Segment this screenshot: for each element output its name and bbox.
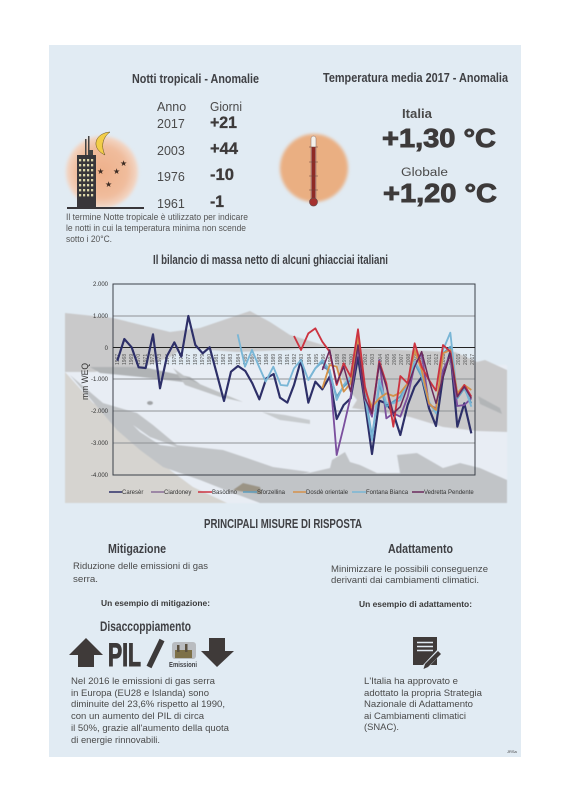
text: definizione adattamento bbox=[331, 564, 488, 586]
y axis labels bbox=[80, 282, 109, 479]
legend: Vedretta Pendente bbox=[424, 490, 474, 496]
x axis year labels: 2003 bbox=[370, 354, 376, 365]
x axis year labels: 1976 bbox=[179, 354, 185, 365]
x axis year labels: 2012 bbox=[434, 354, 440, 365]
icon: city at night: ★ bbox=[97, 167, 104, 176]
table: anomalie notti tropicali: Anno bbox=[157, 100, 186, 114]
x axis year labels: 2004 bbox=[378, 354, 384, 365]
icon: city at night bbox=[66, 132, 144, 209]
table: anomalie notti tropicali: -1 bbox=[210, 192, 224, 211]
legend: Sforzellina bbox=[257, 490, 286, 496]
icon: arrow up bbox=[69, 638, 103, 667]
y axis labels: 0 bbox=[105, 346, 109, 352]
x axis year labels: 1998 bbox=[335, 354, 341, 365]
legend bbox=[109, 490, 474, 496]
line: Fontana Bianca bbox=[238, 333, 471, 440]
legend: Ciardoney bbox=[164, 490, 191, 496]
icon: thermometer bbox=[280, 134, 348, 206]
panel: notti tropicali bbox=[66, 71, 259, 244]
x axis year labels: 2006 bbox=[392, 354, 398, 365]
x axis year labels: 1983 bbox=[228, 354, 234, 365]
x axis year labels: 2011 bbox=[427, 354, 433, 365]
subheading: esempio di mitigazione: Un esempio di mitigazione: bbox=[101, 599, 210, 608]
text: definizione notte tropicale bbox=[66, 212, 248, 244]
background: glacier photo bbox=[65, 311, 507, 503]
heading: mitigazione: Mitigazione bbox=[108, 541, 166, 556]
x axis year labels: 2007 bbox=[399, 354, 405, 365]
text: esempio adattamento: Nazionale di Adattamento bbox=[364, 699, 473, 710]
icon: city at night: ★ bbox=[105, 180, 112, 189]
text: definizione notte tropicale: Il termine Notte tropicale è utilizzato per indicare bbox=[66, 212, 248, 222]
table: anomalie notti tropicali: +44 bbox=[210, 139, 239, 158]
panel: temperatura media bbox=[280, 70, 509, 208]
panel: background bbox=[49, 45, 521, 757]
x axis year labels: 2013 bbox=[441, 354, 447, 365]
line: Sforzellina bbox=[308, 342, 471, 437]
text: definizione mitigazione: serra. bbox=[73, 574, 98, 585]
x axis year labels bbox=[115, 354, 476, 365]
x axis year labels: 1991 bbox=[285, 354, 291, 365]
text: esempio mitigazione: diminuite del 23,6% rispetto al 1990, bbox=[71, 699, 225, 710]
icon: city at night: ★ bbox=[120, 159, 127, 168]
x axis year labels: 2017 bbox=[470, 354, 476, 365]
table: anomalie notti tropicali bbox=[157, 100, 242, 211]
text: esempio mitigazione: di energie rinnovabili. bbox=[71, 735, 160, 746]
x axis year labels: 2015 bbox=[456, 354, 462, 365]
text: esempio mitigazione: Nel 2016 le emissioni di gas serra bbox=[71, 676, 216, 687]
text: definizione adattamento: Minimizzare le possibili conseguenze bbox=[331, 564, 488, 575]
stat: italia: +1,30 °C bbox=[382, 123, 496, 153]
x axis year labels: 1988 bbox=[264, 354, 270, 365]
x axis year labels: 1986 bbox=[250, 354, 256, 365]
x axis year labels: 2009 bbox=[413, 354, 419, 365]
text: esempio adattamento: adottato la propria Strategia bbox=[364, 688, 483, 699]
chart: bilancio di massa bbox=[65, 282, 507, 503]
x axis year labels: 1977 bbox=[186, 354, 192, 365]
table: anomalie notti tropicali: -10 bbox=[210, 165, 234, 184]
y axis labels: 2.000 bbox=[93, 282, 109, 288]
y axis labels: -2.000 bbox=[91, 409, 109, 415]
heading: temperatura media: Temperatura media 2017 - Anomalia bbox=[323, 70, 509, 85]
x axis year labels: 1992 bbox=[292, 354, 298, 365]
x axis year labels: 1982 bbox=[221, 354, 227, 365]
x axis year labels: 2002 bbox=[363, 354, 369, 365]
heading: disaccoppiamento: Disaccoppiamento bbox=[100, 618, 191, 634]
icon: arrow down bbox=[201, 638, 234, 667]
text: definizione mitigazione bbox=[73, 561, 208, 585]
x axis year labels: 2005 bbox=[385, 354, 391, 365]
x axis year labels: 1971 bbox=[143, 354, 149, 365]
table: anomalie notti tropicali: 2017 bbox=[157, 117, 185, 131]
line: Basòdino bbox=[294, 328, 471, 427]
x axis year labels: 1981 bbox=[214, 354, 220, 365]
x axis year labels: 2000 bbox=[349, 354, 355, 365]
heading: principali misure di risposta: PRINCIPALI MISURE DI RISPOSTA bbox=[204, 516, 362, 531]
signature: JRSa bbox=[507, 749, 518, 754]
x axis year labels: 1975 bbox=[172, 354, 178, 365]
x axis year labels: 1993 bbox=[299, 354, 305, 365]
text: definizione mitigazione: Riduzione delle emissioni di gas bbox=[73, 561, 208, 572]
legend: Dosdè orientale bbox=[306, 490, 349, 496]
data lines bbox=[117, 316, 471, 455]
icon: emissioni: Emissioni bbox=[169, 660, 197, 669]
icon: emissioni bbox=[169, 642, 197, 669]
x axis year labels: 1979 bbox=[200, 354, 206, 365]
x axis year labels: 1980 bbox=[207, 354, 213, 365]
heading: adattamento: Adattamento bbox=[388, 541, 453, 556]
table: anomalie notti tropicali: Giorni bbox=[210, 100, 242, 114]
x axis year labels: 1968 bbox=[122, 354, 128, 365]
text: esempio adattamento: (SNAC). bbox=[364, 722, 399, 733]
text: definizione adattamento: derivanti dai cambiamenti climatici. bbox=[331, 575, 479, 586]
table: anomalie notti tropicali: 2003 bbox=[157, 144, 185, 158]
text: definizione notte tropicale: le notti in cui la temperatura minima non scende bbox=[66, 223, 246, 233]
heading: notti tropicali: Notti tropicali - Anomalie bbox=[132, 71, 259, 86]
table: anomalie notti tropicali: 1976 bbox=[157, 170, 185, 184]
x axis year labels: 1973 bbox=[157, 354, 163, 365]
heading: bilancio di massa: Il bilancio di massa netto di alcuni ghiacciai italiani bbox=[153, 252, 388, 267]
x axis year labels: 1967 bbox=[115, 354, 121, 365]
legend: Caresèr bbox=[122, 490, 143, 496]
x axis year labels: 1999 bbox=[342, 354, 348, 365]
text: definizione notte tropicale: sotto i 20°C. bbox=[66, 234, 112, 244]
x axis year labels: 1974 bbox=[165, 354, 171, 365]
text: esempio adattamento bbox=[364, 676, 483, 733]
x axis year labels: 1984 bbox=[236, 354, 242, 365]
x axis year labels: 2014 bbox=[449, 354, 455, 365]
text: esempio adattamento: ai Cambiamenti climatici bbox=[364, 711, 466, 722]
text: esempio mitigazione: con un aumento del PIL di circa bbox=[71, 711, 205, 722]
line: Caresèr bbox=[117, 316, 471, 454]
x axis year labels: 2016 bbox=[463, 354, 469, 365]
legend: Basòdino bbox=[212, 490, 238, 496]
panel: mitigazione bbox=[69, 541, 234, 746]
stat: italia: Italia bbox=[402, 107, 433, 121]
x axis year labels: 1978 bbox=[193, 354, 199, 365]
icon: slash bbox=[149, 640, 162, 667]
label: PIL: PIL bbox=[108, 637, 141, 673]
line: Dosdè orientale bbox=[322, 337, 471, 410]
x axis year labels: 1972 bbox=[150, 354, 156, 365]
x axis year labels: 1994 bbox=[307, 354, 313, 365]
y axis labels: -1.000 bbox=[91, 377, 109, 383]
y axis labels: mm WEQ bbox=[80, 363, 90, 400]
x axis year labels: 1969 bbox=[129, 354, 135, 365]
text: esempio mitigazione: il 50%, grazie all'aumento della quota bbox=[71, 723, 230, 734]
y axis labels: 1.000 bbox=[93, 314, 109, 320]
x axis year labels: 1995 bbox=[314, 354, 320, 365]
line: Ciardoney bbox=[322, 347, 471, 455]
x axis year labels: 1987 bbox=[257, 354, 263, 365]
x axis year labels: 1997 bbox=[328, 354, 334, 365]
x axis year labels: 1990 bbox=[278, 354, 284, 365]
x axis year labels: 2010 bbox=[420, 354, 426, 365]
subheading: esempio di adattamento: Un esempio di adattamento: bbox=[359, 600, 472, 609]
text: esempio adattamento: L'Italia ha approvato e bbox=[364, 676, 458, 687]
plot frame and gridlines bbox=[113, 284, 475, 475]
x axis year labels: 1989 bbox=[271, 354, 277, 365]
stat: globale: +1,20 °C bbox=[383, 178, 497, 208]
icon: document and pencil bbox=[413, 637, 441, 669]
text: esempio mitigazione: in Europa (EU28 e Islanda) sono bbox=[71, 688, 209, 699]
table: anomalie notti tropicali: 1961 bbox=[157, 197, 185, 211]
table: anomalie notti tropicali: +21 bbox=[210, 113, 237, 132]
stat: italia bbox=[382, 107, 496, 153]
y axis labels: -4.000 bbox=[91, 473, 109, 479]
x axis year labels: 1970 bbox=[136, 354, 142, 365]
line: Vedretta Pendente bbox=[322, 345, 471, 413]
stat: globale: Globale bbox=[401, 167, 448, 179]
text: esempio mitigazione bbox=[71, 676, 230, 746]
x axis year labels: 1985 bbox=[243, 354, 249, 365]
y axis labels: -3.000 bbox=[91, 441, 109, 447]
panel: adattamento bbox=[331, 541, 488, 733]
stat: globale bbox=[383, 167, 497, 208]
x axis year labels: 1996 bbox=[321, 354, 327, 365]
x axis year labels: 2008 bbox=[406, 354, 412, 365]
x axis year labels: 2001 bbox=[356, 354, 362, 365]
legend: Fontana Bianca bbox=[366, 490, 409, 496]
icon: city at night: ★ bbox=[113, 167, 120, 176]
